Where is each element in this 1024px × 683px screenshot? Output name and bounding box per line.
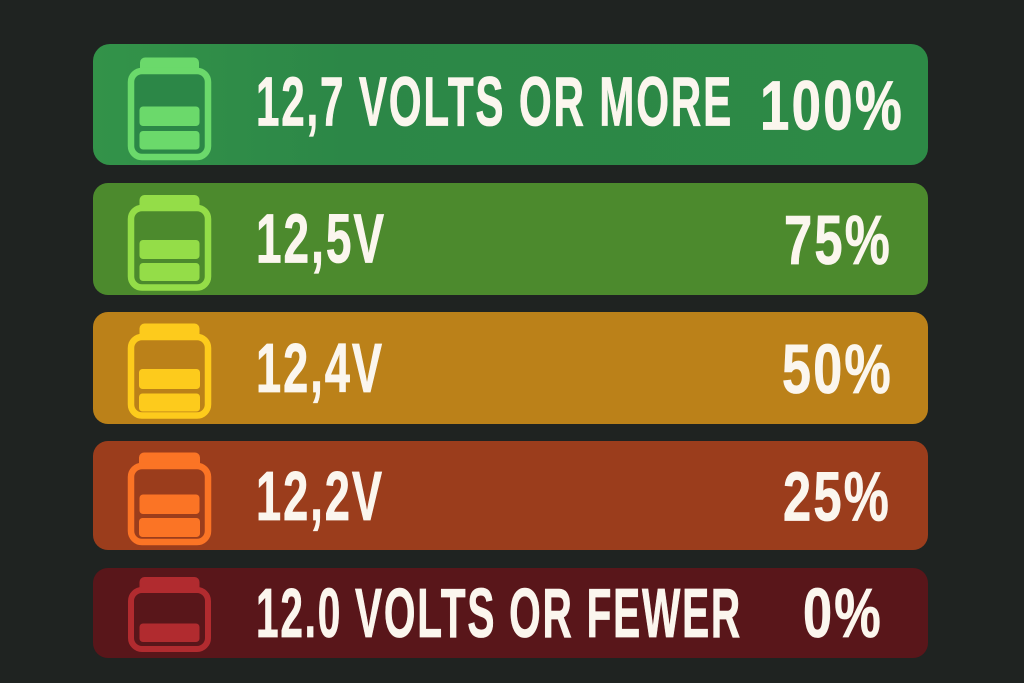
label: 12,5V: 12,5V	[256, 200, 386, 278]
value: 25%: 25%	[783, 458, 891, 536]
icon: full battery	[131, 58, 208, 157]
row: 12.7 volts or more, 100%	[93, 44, 928, 165]
row: 12.2V, 25%	[93, 441, 928, 550]
label: 12,2V: 12,2V	[256, 457, 384, 535]
row: 12.4V, 50%	[93, 312, 928, 424]
value: 75%: 75%	[784, 201, 892, 279]
icon: battery 50%	[131, 324, 208, 416]
row: 12.0 volts or fewer, 0%	[93, 568, 928, 658]
icon: battery 25%	[131, 452, 208, 542]
value: 100%: 100%	[760, 66, 904, 144]
icon: empty battery	[131, 577, 208, 649]
value: 0%: 0%	[803, 574, 883, 652]
icon: battery 75%	[131, 195, 208, 288]
label: 12,4V: 12,4V	[256, 329, 384, 407]
value: 50%: 50%	[782, 330, 893, 408]
row: 12.5V, 75%	[93, 183, 928, 295]
label: 12,7 volts or more: 12,7 VOLTS OR MORE	[256, 62, 733, 140]
